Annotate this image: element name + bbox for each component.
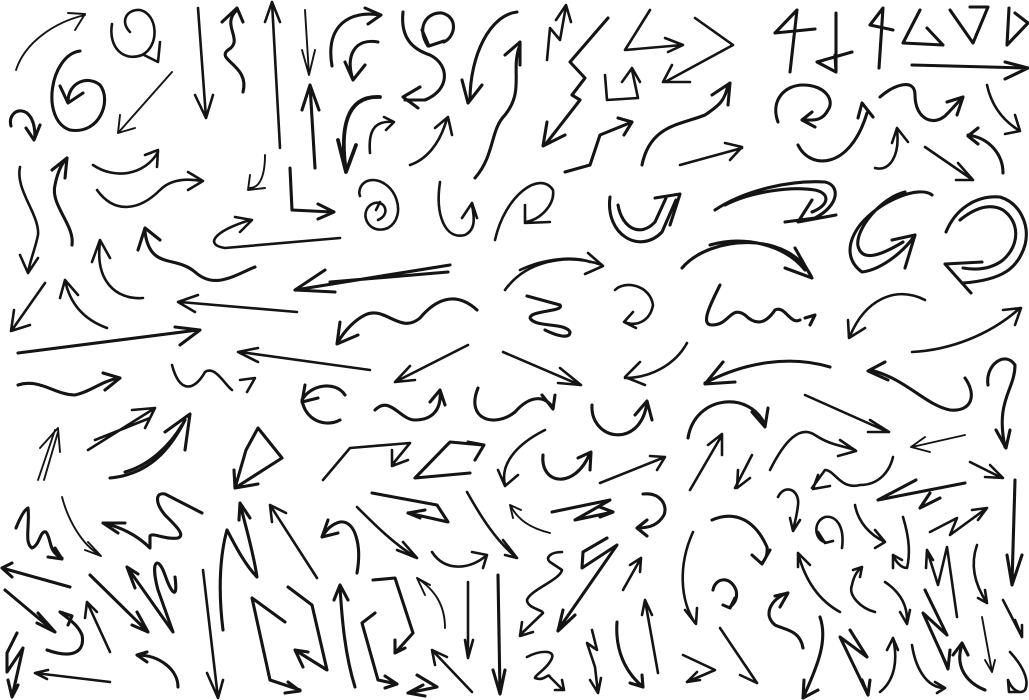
arrow: centre spiral	[359, 180, 398, 230]
arrow: small hook up	[875, 128, 908, 169]
arrow: curve up	[92, 240, 143, 298]
arrow: S curve	[403, 12, 444, 108]
arrow: C hook	[851, 567, 875, 612]
arrow: short curve up	[410, 117, 452, 165]
arrow: chevron	[683, 655, 715, 682]
arrow: angle down	[323, 443, 410, 480]
arrow: big U up	[798, 103, 873, 161]
arrow: half circle	[637, 494, 665, 536]
arrow: bow right	[617, 622, 643, 687]
arrow: angle left	[663, 18, 733, 82]
arrow: short up right	[623, 558, 641, 590]
arrow: long curve	[912, 308, 1021, 352]
arrow: small double up	[38, 428, 60, 480]
arrow: thin left bottom	[35, 670, 110, 682]
arrow: G loop	[850, 192, 932, 272]
arrow: short right small	[970, 462, 1003, 478]
arrow: curve down long	[462, 12, 517, 103]
arrow: arc down	[688, 402, 768, 438]
arrow: wavy left	[337, 299, 477, 344]
arrow: elbow left	[373, 578, 413, 653]
arrow: smile small	[432, 552, 487, 568]
arrow: wave small	[375, 390, 445, 420]
arrow: small loop	[713, 580, 737, 608]
arrow: wave right	[770, 432, 856, 470]
arrow: S wavy	[520, 552, 562, 636]
arrow: diagonal right	[503, 352, 581, 385]
arrow: question hook	[778, 489, 800, 531]
arrow: long hook	[214, 217, 340, 248]
arrow: wavy up	[475, 42, 520, 178]
arrow: zig long	[558, 538, 617, 631]
arrow: curve down	[338, 97, 380, 172]
arrow: arc down right	[712, 516, 770, 564]
arrow: large spiral	[52, 51, 105, 130]
arrow: long left	[2, 563, 70, 587]
arrow: inverted triangle	[950, 7, 988, 43]
arrow: cross down	[817, 13, 852, 72]
arrow: squiggle bottom	[527, 652, 564, 690]
arrow: small hook right	[370, 117, 394, 153]
arrow: right spiral	[776, 85, 830, 127]
arrow: zig right	[930, 508, 987, 535]
arrow: diagonal long	[90, 575, 148, 632]
arrow: hook curve	[322, 520, 359, 573]
arrow: long up left	[270, 505, 317, 578]
arrow: smile right	[93, 150, 158, 174]
arrow: thick up hook	[953, 643, 985, 690]
arrow: thin left	[238, 348, 370, 370]
arrow: curve right	[331, 8, 381, 66]
arrow: thin down	[982, 617, 995, 672]
arrow: arc right	[885, 582, 910, 624]
arrow: mountain wave	[103, 494, 202, 548]
arrow: long diagonal right	[805, 395, 889, 432]
arrow: diagonal short	[395, 345, 468, 382]
arrow: smile up	[543, 452, 591, 479]
arrow: short curve left	[625, 343, 687, 385]
arrow: wave up small	[52, 158, 72, 245]
arrow: wedge right	[552, 500, 613, 520]
arrow: squiggle up	[222, 8, 244, 92]
arrow: tall N up	[220, 503, 257, 630]
arrow: small spiral	[111, 10, 160, 62]
arrow: curve up bottom	[880, 638, 898, 692]
arrow: kite	[234, 428, 282, 488]
arrow: medium left	[178, 295, 297, 312]
arrow: bracket left	[288, 587, 327, 670]
arrow: L shape	[290, 168, 334, 219]
arrow: lower wave	[812, 457, 893, 489]
arrow: left wave down	[19, 167, 38, 273]
arrow: broken wave	[172, 365, 255, 392]
arrow: triangle	[903, 10, 943, 45]
arrow: squiggle bottom left	[16, 508, 62, 559]
arrow: long down	[195, 8, 213, 118]
arrow: tall zigzag	[7, 633, 23, 697]
arrow: N zigzag	[923, 590, 950, 669]
arrow: U hook	[439, 182, 477, 236]
arrow: squiggle thin down	[587, 630, 601, 693]
arrow: double sweep	[715, 182, 836, 222]
arrow: hook up	[47, 612, 83, 654]
arrow: diagonal thin	[467, 492, 517, 558]
arrow: short right	[680, 143, 742, 165]
arrow: arc left bottom	[137, 652, 178, 687]
arrow: short left	[911, 435, 965, 452]
arrow: diagonal down right	[925, 147, 973, 180]
arrow: small hook	[248, 155, 265, 190]
arrow: right triangle	[1007, 8, 1028, 45]
arrow: triangle angle	[415, 442, 484, 478]
arrow: step zigzag	[565, 118, 632, 172]
arrow: short diagonal	[11, 283, 45, 331]
arrow: hook right	[855, 505, 885, 548]
arrow: curl	[302, 385, 345, 423]
arrow: wave left side	[18, 373, 120, 395]
arrow: thin right	[600, 456, 665, 483]
arrow: short right edge	[1003, 600, 1022, 637]
arrow: diagonal up	[690, 434, 722, 490]
arrow: long right	[912, 62, 1028, 79]
arrow: long curve up right	[642, 83, 730, 165]
arrow: curve down left	[498, 430, 545, 486]
arrow: angle right	[625, 10, 683, 52]
arrow: C loop	[945, 197, 1026, 293]
arrow: four shape small	[870, 8, 893, 68]
arrow: arc left	[848, 294, 925, 338]
arrow: curve up left	[510, 505, 550, 533]
arrow: lightning	[543, 18, 608, 146]
arrow: short up	[302, 85, 319, 168]
arrow: crescent hook	[495, 183, 553, 240]
arrow: small zigzag up	[547, 5, 571, 60]
arrow: short down	[735, 455, 752, 488]
arrow: small curl	[615, 285, 653, 328]
arrow: bracket right	[252, 598, 300, 693]
arrow: curve up thin	[60, 280, 107, 328]
arrow: thin curve down	[62, 497, 101, 556]
arrow: S left	[868, 362, 971, 410]
arrow: S up	[769, 593, 803, 648]
arrow: short down mid	[465, 582, 473, 658]
arrow: zig loop	[127, 563, 176, 632]
arrow: tall up	[334, 585, 355, 687]
arrow: hook down right	[988, 359, 1015, 448]
arrow: loop	[816, 517, 843, 548]
arrow: long up	[265, 2, 280, 148]
arrow: small chevron	[408, 675, 437, 696]
arrow: top left curve	[16, 13, 85, 70]
arrow: diagonal thick	[5, 590, 55, 632]
arrow: top spiral	[422, 13, 454, 46]
arrow: double diagonal	[88, 408, 155, 450]
arrow: M zigzag	[926, 547, 957, 617]
arrow: thin tall up	[642, 600, 658, 673]
arrow: wave right	[880, 85, 963, 121]
arrow: long slight down	[203, 570, 223, 698]
arrow: sharp wedge	[878, 480, 965, 508]
arrow: U up	[592, 401, 652, 435]
arrow: hook left	[968, 128, 1003, 173]
arrow: long down mid	[493, 575, 505, 694]
arrow: curve down right	[987, 85, 1020, 134]
arrow: diagonal up left	[432, 650, 472, 692]
arrow: long thick right	[18, 327, 200, 353]
arrow: J right	[912, 645, 945, 693]
arrow: short down	[302, 10, 315, 75]
arrow: diagonal down	[357, 507, 417, 558]
arrow: elbow right	[362, 613, 397, 688]
arrow: wavy up left	[138, 228, 255, 280]
arrow: smile wave	[475, 388, 555, 420]
arrow: diagonal mid	[720, 628, 757, 683]
arrow: double U	[610, 194, 680, 242]
arrow: Z down	[840, 630, 870, 695]
arrow: curve up left lower	[798, 553, 840, 612]
arrow: bent left	[372, 493, 448, 522]
arrow: diagonal down left	[118, 72, 172, 133]
arrow: hook down	[345, 41, 378, 80]
arrow: long down right edge	[1007, 480, 1022, 585]
arrow: bow left down	[803, 617, 823, 698]
arrow: wave right broken	[707, 285, 815, 325]
arrow: thin curve up	[417, 578, 445, 628]
arrow: double curve	[110, 414, 190, 478]
arrow: four shape	[775, 10, 815, 72]
arrow: arc wide left	[705, 361, 830, 384]
arrow: tiny hook	[10, 111, 40, 140]
arrow: long double left	[295, 265, 450, 292]
arrow: wave right long	[97, 172, 203, 207]
arrow: small up diagonal	[85, 602, 110, 652]
arrow: double arc small	[505, 253, 603, 290]
arrow: bracket up	[605, 68, 640, 100]
arrow: double arc	[682, 241, 812, 278]
arrow: J hook	[893, 517, 909, 568]
arrow: bow down	[974, 545, 987, 603]
arrow: hook corner	[1008, 652, 1027, 692]
arrow: squiggle down	[527, 296, 570, 336]
arrow: long bow	[683, 532, 697, 624]
